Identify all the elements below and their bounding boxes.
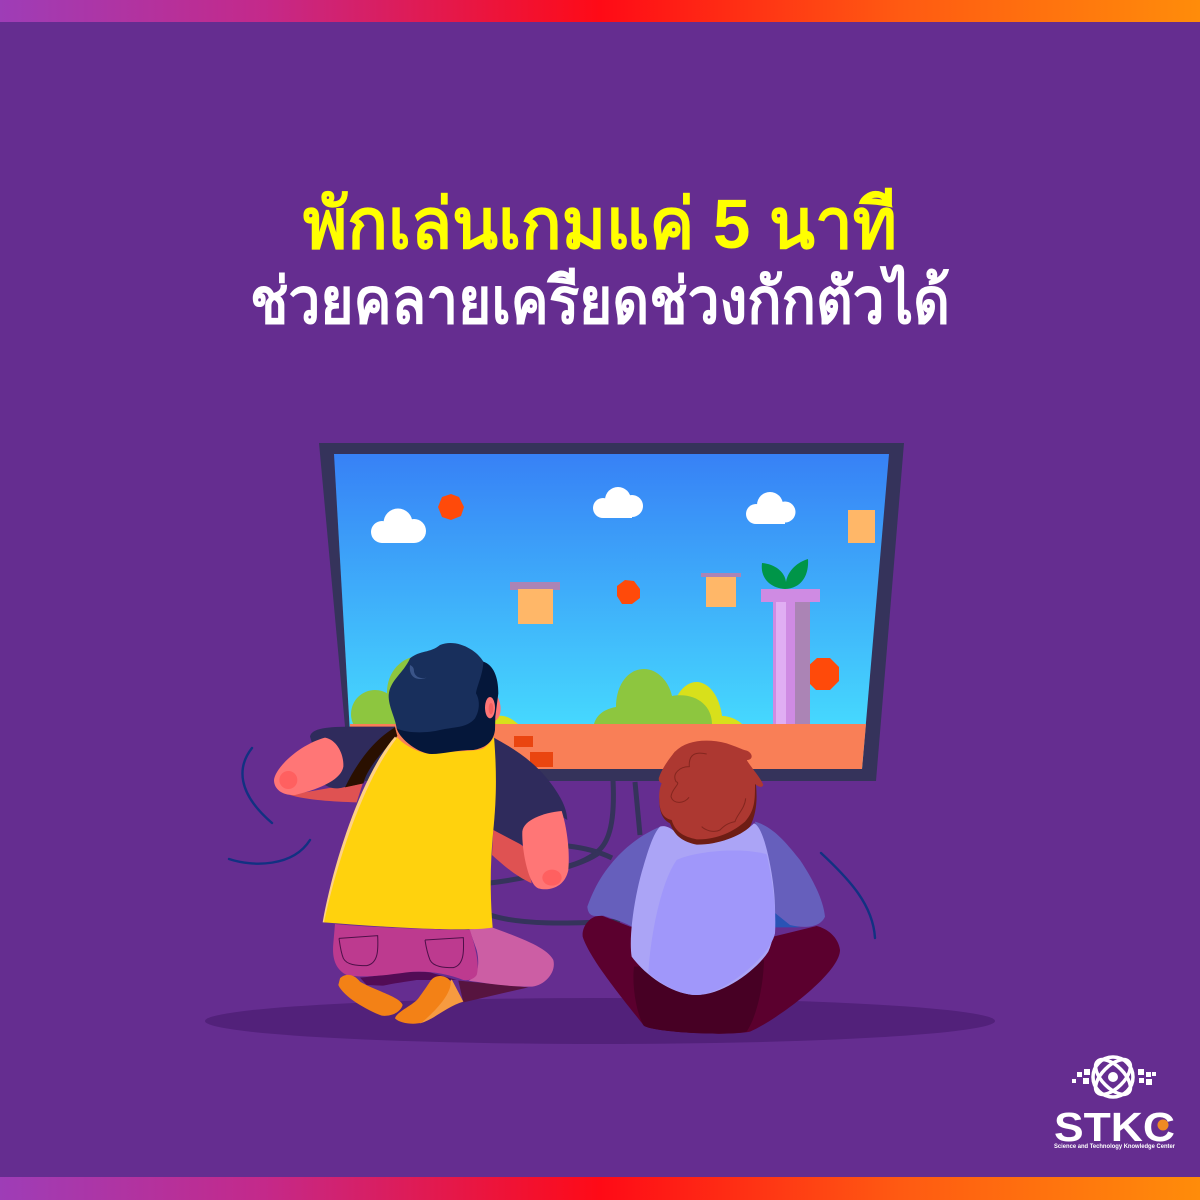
logo wordmark: STKC — [1054, 1104, 1175, 1150]
top gradient bar — [0, 0, 1200, 22]
boy sweater shade — [648, 851, 775, 995]
cables — [490, 780, 640, 923]
block 3 — [848, 510, 875, 543]
man maroon shin — [458, 981, 528, 1002]
man hair — [389, 643, 483, 732]
boy legs — [583, 916, 840, 1034]
heading line 1: พักเล่นเกมแค่ 5 นาที — [303, 185, 897, 263]
logo atom — [1090, 1054, 1136, 1100]
man right shoe — [395, 976, 451, 1024]
pipe — [761, 589, 820, 724]
man ankle — [420, 979, 463, 1023]
cloud middle — [593, 487, 643, 518]
logo pixels — [1072, 1069, 1156, 1085]
plant leaves — [762, 559, 808, 589]
floor shadow — [205, 998, 995, 1044]
boy left sleeve — [587, 823, 670, 927]
pockets — [339, 936, 464, 968]
man shirt strap — [345, 727, 397, 787]
logo tagline: Science and Technology Knowledge Center — [1054, 1144, 1176, 1150]
man right palm — [542, 870, 562, 886]
boy right sleeve — [755, 822, 825, 927]
man — [274, 643, 569, 1024]
boy hair — [659, 741, 763, 839]
boy sweater — [631, 823, 775, 995]
man left shoe — [338, 975, 403, 1016]
coin middle — [617, 580, 640, 604]
ground — [350, 724, 866, 769]
bricks — [514, 736, 553, 767]
coin top — [438, 494, 464, 520]
boy hair curls — [671, 753, 746, 831]
man yellow shirt — [324, 737, 496, 929]
logo — [1054, 1054, 1176, 1150]
coin right — [807, 658, 839, 690]
block 1 — [510, 582, 560, 624]
hair highlight — [410, 665, 427, 679]
boy hair shadow — [659, 752, 757, 845]
cloud right — [746, 492, 796, 524]
boy seat shadow — [633, 960, 764, 1034]
man trousers — [333, 924, 478, 980]
sky screen — [334, 454, 889, 769]
motion line right — [821, 853, 875, 938]
heading line 2: ช่วยคลายเครียดช่วงกักตัวได้ — [250, 264, 950, 337]
man right forearm — [492, 829, 532, 883]
block 2 — [701, 573, 741, 607]
man neck skin — [492, 688, 501, 722]
motion lines left — [229, 748, 310, 864]
boy — [583, 741, 840, 1034]
man left sleeve — [310, 727, 397, 788]
logo dot — [1158, 1120, 1168, 1130]
title — [250, 185, 950, 337]
man right sleeve — [493, 737, 567, 847]
man light trouser leg — [468, 928, 554, 987]
bushes — [351, 656, 742, 738]
man dark leg under — [360, 972, 457, 986]
tv frame — [319, 443, 904, 781]
television — [319, 443, 904, 781]
man right hand — [522, 811, 569, 889]
man ear — [485, 697, 495, 718]
bottom gradient bar — [0, 1177, 1200, 1200]
man left forearm — [290, 782, 363, 802]
man hair dark — [397, 662, 498, 754]
man left hand — [274, 738, 343, 795]
boy hand — [775, 912, 802, 927]
man left palm — [279, 771, 297, 789]
man shirt edge — [323, 737, 397, 922]
cloud left — [371, 508, 426, 543]
